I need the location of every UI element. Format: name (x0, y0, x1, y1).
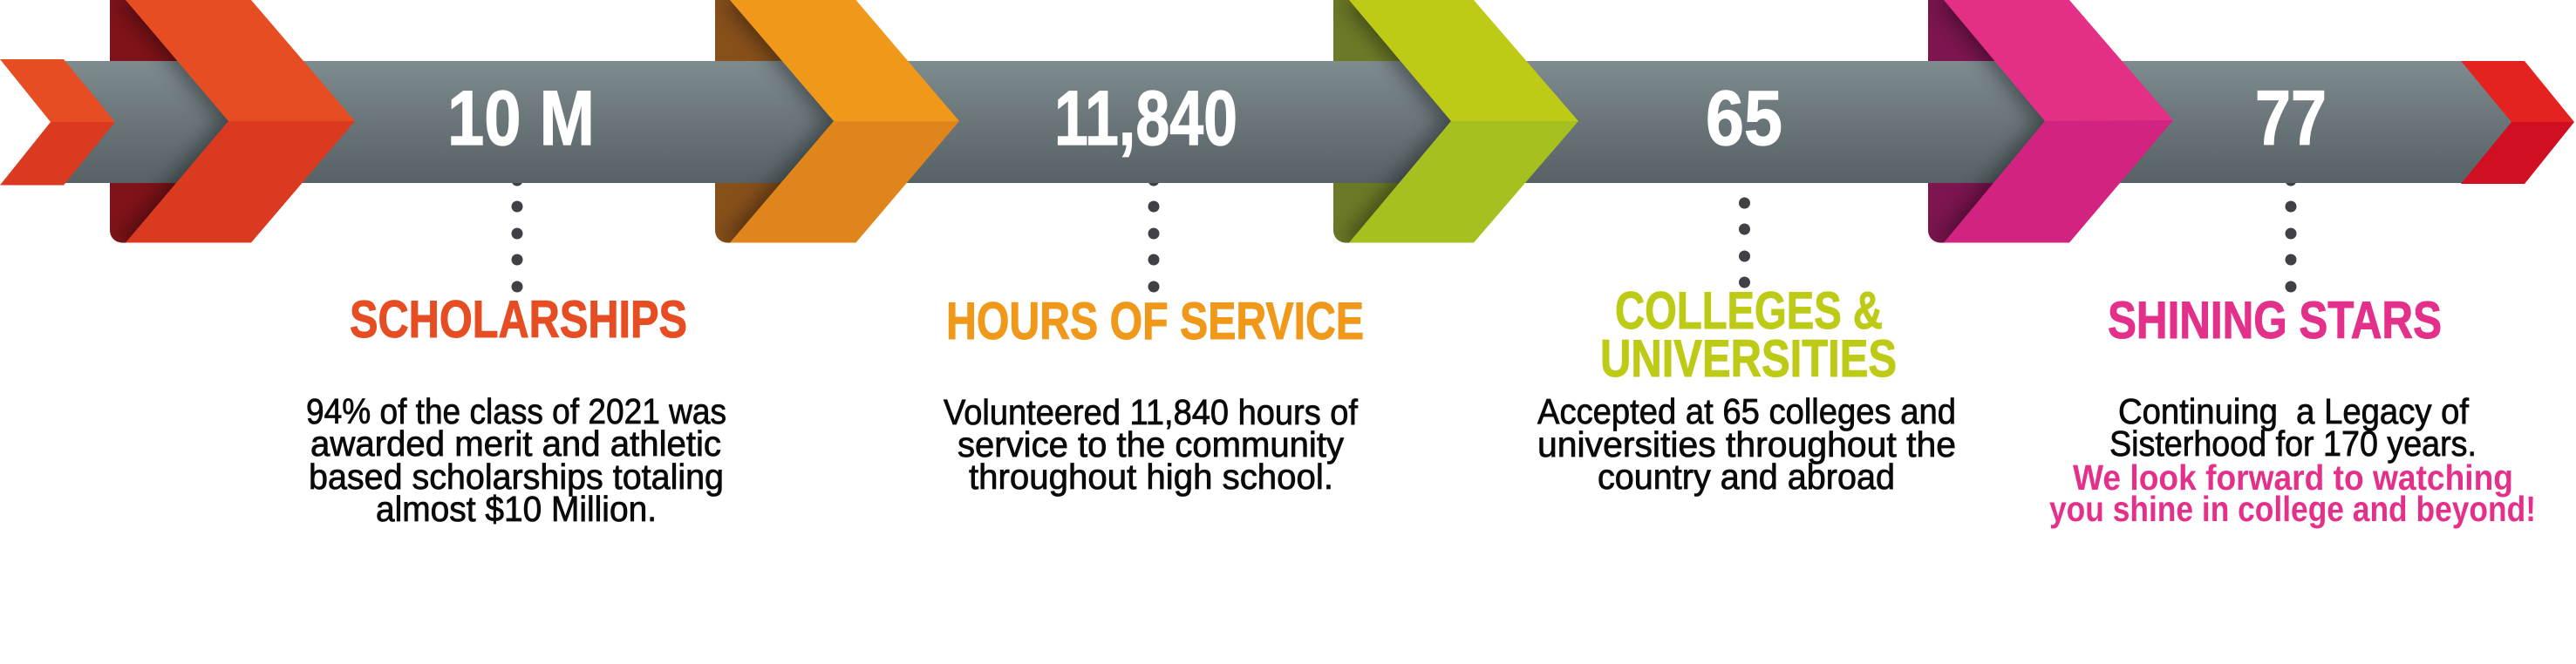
heading: shining stars: SHINING STARS (2108, 291, 2442, 349)
body: hours of service: service to the community (957, 424, 1344, 464)
panel: scholarships (306, 290, 726, 529)
chevron: orange (730, 0, 959, 242)
chevron: green (1349, 0, 1578, 242)
chevron shadow: orange (717, 0, 834, 243)
body: shining stars: Continuing a Legacy of (2118, 391, 2470, 431)
heading: scholarships: SCHOLARSHIPS (350, 290, 687, 349)
connector dots: scholarships (511, 174, 523, 293)
body: hours of service (944, 392, 1359, 497)
chevron: red (126, 0, 355, 242)
chevron shadow: pink (1931, 0, 2045, 243)
stat: 11,840: 11,840 (1054, 74, 1237, 161)
body: colleges and universities (1537, 391, 1956, 497)
panel: hours of service (944, 292, 1364, 497)
back fold: pink (1928, 0, 2015, 242)
back fold: green (1333, 0, 1421, 242)
connector dots: shining stars (2285, 174, 2297, 293)
body: hours of service: throughout high school. (969, 457, 1333, 497)
back fold: orange (715, 0, 802, 242)
heading: colleges and universities (1600, 281, 1897, 388)
body: colleges and universities: universities throughout the (1537, 424, 1956, 464)
chevron shadow: green (1336, 0, 1451, 243)
stat: 77: 77 (2255, 74, 2327, 161)
heading: colleges and universities: UNIVERSITIES (1600, 329, 1897, 388)
body: scholarships: awarded merit and athletic (310, 423, 721, 464)
body: scholarships (306, 391, 726, 529)
closing message (2049, 457, 2536, 529)
back fold: red (110, 0, 197, 242)
heading: colleges and universities: COLLEGES & (1615, 281, 1883, 340)
infographic timeline (0, 0, 2574, 528)
closing message: We look forward to watching (2073, 457, 2513, 498)
body: colleges and universities: country and abroad (1598, 457, 1895, 497)
connector dots: colleges and universities (1739, 197, 1750, 288)
heading: hours of service: HOURS OF SERVICE (946, 292, 1364, 350)
body: shining stars: Sisterhood for 170 years. (2109, 423, 2477, 464)
body: scholarships: almost $10 Million. (376, 489, 657, 529)
chevron: pink (1944, 0, 2173, 242)
end arrow (2461, 61, 2574, 184)
body: shining stars (2109, 391, 2477, 464)
panel: shining stars (2049, 291, 2536, 529)
body: hours of service: Volunteered 11,840 hours of (944, 392, 1359, 432)
connector dots: hours of service (1148, 174, 1160, 293)
stat: 65: 65 (1706, 74, 1782, 161)
chevron shadow: red (113, 0, 228, 243)
grey timeline bar (61, 61, 2513, 183)
body: scholarships: 94% of the class of 2021 was (306, 391, 726, 431)
body: colleges and universities: Accepted at 65 colleges and (1537, 391, 1956, 431)
stat: 10 M: 10 M (447, 74, 595, 161)
body: scholarships: based scholarships totaling (309, 457, 724, 497)
start arrow (0, 59, 115, 185)
panel: colleges and universities (1537, 281, 1956, 497)
